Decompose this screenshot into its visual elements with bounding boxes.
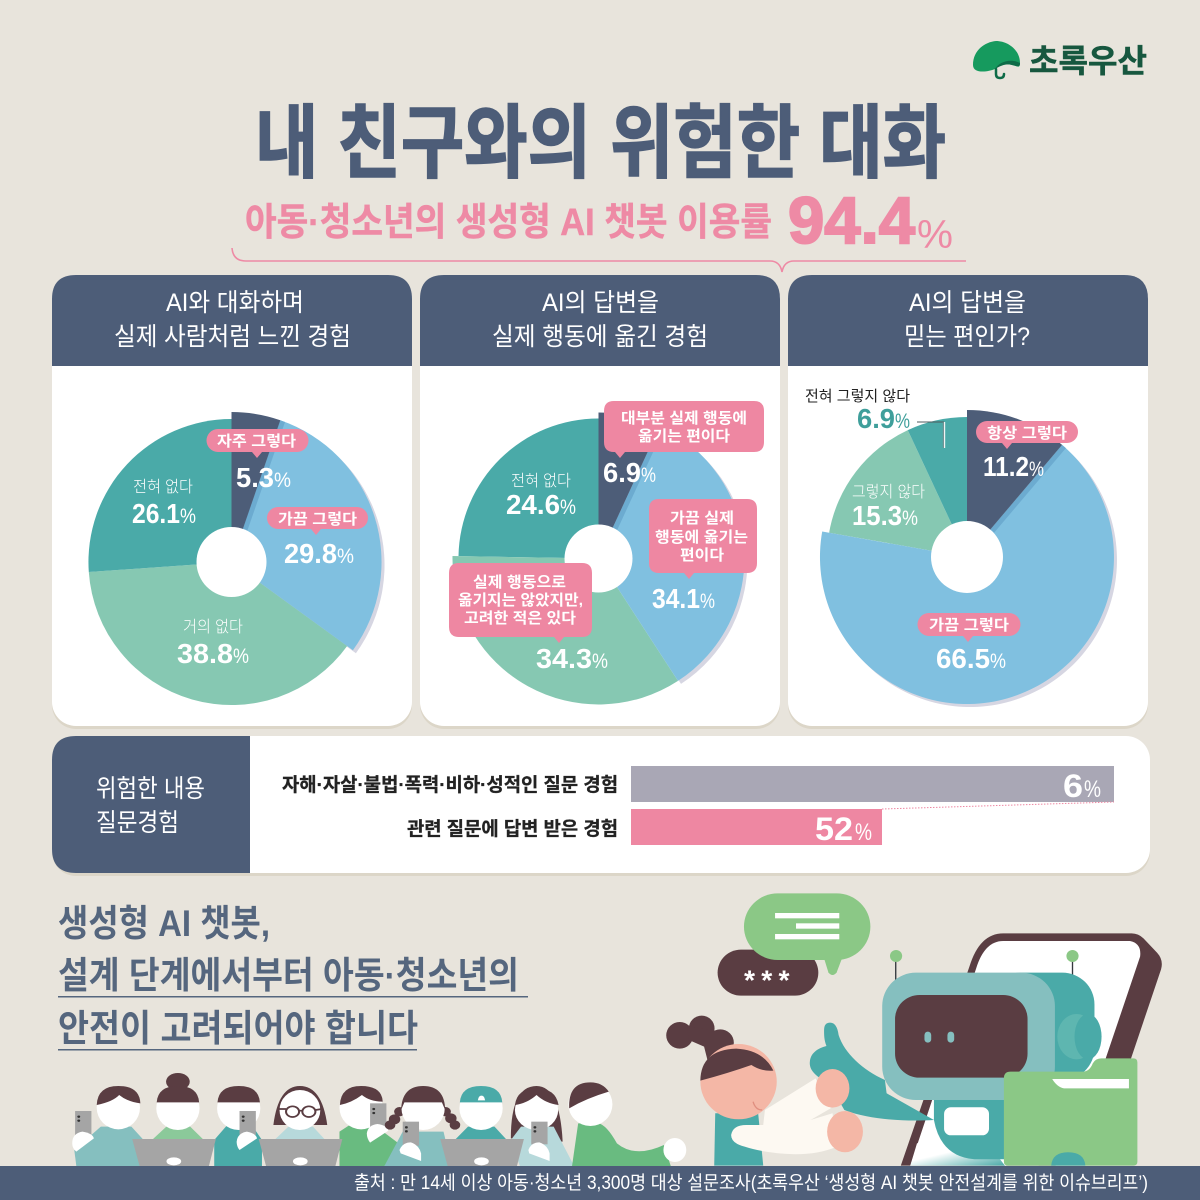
conclusion text: 안전이 고려되어야 합니다 [58, 1008, 418, 1049]
callout: 자주 그렇다 [206, 429, 308, 458]
chat bubble green [744, 893, 870, 975]
girl [666, 1016, 863, 1166]
subtitle with usage rate [245, 183, 953, 257]
callout: 자주 그렇다: 자주 그렇다 [217, 433, 296, 450]
pie chart [452, 412, 747, 704]
label 전혀 없다: 전혀 없다 [133, 478, 193, 496]
value 11.2%: 11.2 [983, 451, 1029, 482]
label 전혀 없다: 전혀 없다 [511, 472, 571, 490]
pie chart [820, 410, 1117, 707]
bar: 52%: % [855, 819, 872, 846]
person 8 with long hair [511, 1086, 574, 1166]
value 38.8%: % [233, 645, 249, 668]
logo wordmark: 초록우산 [1029, 43, 1147, 79]
logo: 초록우산 [973, 41, 1147, 79]
panel side label [52, 736, 250, 873]
panel: dangerous question experience [52, 736, 1150, 876]
robot arm with thumbs up [810, 1023, 934, 1121]
callout: 항상 그렇다 [976, 421, 1078, 449]
person 9 reaching out [568, 1082, 686, 1166]
value 5.3%: % [274, 469, 291, 492]
person 1 [72, 1086, 144, 1166]
footer source bar [0, 1166, 1200, 1200]
panel header [420, 275, 780, 366]
title: 내 친구와의 위험한 대화 [255, 99, 946, 188]
value 29.8%: 29.8 [284, 538, 337, 569]
bar: 52% [631, 809, 882, 847]
leader line [917, 422, 945, 448]
callout: 실제 행동으로 옮기지는 않았지만, 고려한 적은 있다: 실제 행동으로 [473, 574, 566, 591]
conclusion text: 생성형 AI 챗봇, [58, 903, 270, 944]
person 5 [339, 1086, 399, 1166]
panel header: 실제 사람처럼 느낀 경험 [114, 323, 351, 351]
label 거의 없다: 거의 없다 [183, 618, 243, 636]
value 34.1%: % [700, 590, 715, 613]
panel side label: 위험한 내용 [96, 775, 205, 803]
illustration: girl and robot chatbot [666, 893, 1162, 1166]
callout: 가끔 실제 행동에 옮기는 편이다 [649, 499, 757, 579]
conclusion text: 설계 단계에서부터 아동·청소년의 [58, 955, 519, 996]
value 15.3%: 15.3 [852, 500, 902, 531]
callout: 가끔 실제 행동에 옮기는 편이다: 행동에 옮기는 [655, 529, 748, 546]
person 2 [153, 1073, 203, 1139]
robot antennas [890, 950, 1079, 1015]
panel header: 믿는 편인가? [904, 323, 1030, 351]
callout: 가끔 그렇다: 가끔 그렇다 [278, 511, 357, 528]
panel: felt like a real person [52, 275, 412, 729]
panel side label: 질문경험 [96, 809, 179, 837]
label 전혀 그렇지 않다: 전혀 그렇지 않다 [805, 388, 910, 405]
subtitle with usage rate: % [917, 213, 953, 257]
callout: 실제 행동으로 옮기지는 않았지만, 고려한 적은 있다: 고려한 적은 있다 [464, 610, 576, 627]
value 34.3%: 34.3 [536, 643, 592, 674]
callout: 실제 행동으로 옮기지는 않았지만, 고려한 적은 있다: 옮기지는 않았지만, [458, 592, 583, 609]
person 7 with cap [456, 1086, 506, 1139]
bracket under subtitle [232, 248, 966, 272]
value 6.9%: 6.9 [603, 457, 641, 488]
person 4 with glasses [273, 1086, 327, 1139]
callout: 가끔 그렇다: 가끔 그렇다 [929, 617, 1009, 634]
chat bubble dark: *** [744, 964, 790, 996]
robot body [934, 1100, 1022, 1159]
callout: 가끔 실제 행동에 옮기는 편이다: 가끔 실제 [670, 510, 734, 527]
person 6 with braids [384, 1086, 460, 1166]
callout: 실제 행동으로 옮기지는 않았지만, 고려한 적은 있다 [449, 563, 592, 643]
bar: 6%: 6 [1063, 768, 1083, 804]
value 34.3%: % [592, 650, 608, 673]
conclusion text [58, 903, 528, 1050]
panel header: AI와 대화하며 [166, 289, 304, 317]
callout: 대부분 실제 행동에 옮기는 편이다: 대부분 실제 행동에 [621, 410, 747, 427]
pie chart [88, 412, 385, 705]
callout: 항상 그렇다: 항상 그렇다 [987, 425, 1067, 442]
laptop 1 [132, 1139, 216, 1166]
value 6.9%: % [641, 464, 656, 487]
panel header: AI의 답변을 [909, 289, 1026, 317]
panel header [788, 275, 1148, 366]
panel header [52, 275, 412, 366]
value 6.9% teal: 6.9 [857, 403, 895, 434]
icon: green umbrella [973, 41, 1020, 78]
value 38.8%: 38.8 [177, 638, 233, 669]
value 15.3%: % [902, 507, 918, 530]
bar chart [282, 766, 1114, 847]
value 6.9% teal: % [895, 410, 910, 433]
laptop 3 [440, 1139, 524, 1166]
robot ear [1057, 1014, 1102, 1059]
tablet frame [901, 933, 1162, 1166]
value 5.3%: 5.3 [236, 462, 274, 493]
value 66.5%: 66.5 [936, 643, 990, 674]
panel header: AI의 답변을 [542, 289, 659, 317]
panel header: 실제 행동에 옮긴 경험 [492, 323, 708, 351]
subtitle with usage rate: 아동·청소년의 생성형 AI 챗봇 이용률 [245, 202, 772, 244]
value 24.6%: 24.6 [506, 489, 560, 520]
callout: 가끔 그렇다 [918, 613, 1021, 642]
robot head back [988, 973, 1094, 1080]
value 26.1%: 26.1 [132, 498, 180, 529]
chat bubble dark [718, 950, 818, 996]
bar label: 질문 경험: 자해·자살·불법·폭력·비하·성적인 질문 경험 [282, 774, 618, 796]
callout: 대부분 실제 행동에 옮기는 편이다: 옮기는 편이다 [638, 428, 730, 445]
callout: 대부분 실제 행동에 옮기는 편이다 [604, 401, 764, 458]
bar label: 답변 받은 경험: 관련 질문에 답변 받은 경험 [407, 818, 618, 840]
value 24.6%: % [560, 496, 576, 519]
value 11.2%: % [1029, 458, 1044, 481]
person 3 [214, 1086, 262, 1166]
bar: 52%: 52 [815, 811, 853, 847]
callout: 가끔 그렇다 [267, 507, 368, 535]
callout: 가끔 실제 행동에 옮기는 편이다: 편이다 [680, 547, 724, 564]
bar: 6% [631, 766, 1114, 804]
panel: acted on AI answers [420, 275, 780, 729]
laptop 2 [259, 1139, 342, 1166]
label 그렇지 않다: 그렇지 않다 [852, 483, 925, 501]
value 66.5%: % [990, 650, 1006, 673]
bar: 6%: % [1084, 776, 1101, 803]
value 26.1%: % [180, 505, 196, 528]
folder [1004, 1058, 1137, 1166]
value 34.1%: 34.1 [652, 583, 700, 614]
illustration: group of young people with devices [72, 1073, 686, 1166]
panel: trust in AI answers [788, 275, 1148, 729]
value 29.8%: % [337, 545, 354, 568]
robot face [882, 973, 1055, 1100]
subtitle with usage rate: 94.4 [788, 183, 915, 257]
